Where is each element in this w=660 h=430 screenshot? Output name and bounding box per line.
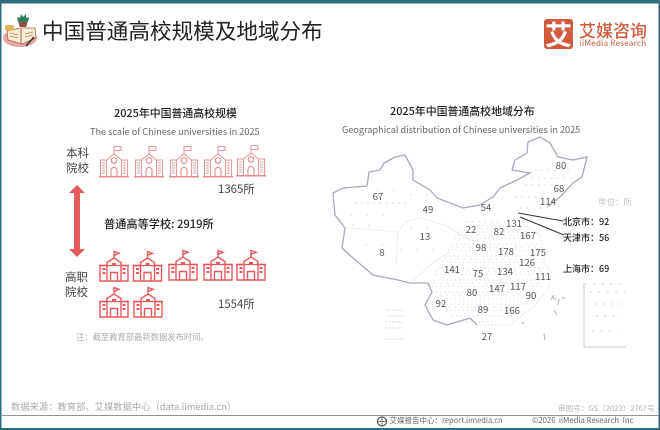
map values: 114: [540, 194, 556, 208]
map values: 82: [494, 224, 504, 238]
double arrow: [69, 185, 85, 257]
map values: 98: [476, 240, 486, 254]
map values: 89: [478, 302, 488, 316]
note: 注：截至教育部最新数据发布时间。: [76, 331, 209, 343]
map values: 49: [423, 202, 433, 216]
icon: report center globe: [378, 417, 386, 426]
map values: 166: [504, 303, 520, 317]
leader lines: Beijing and Tianjin: [518, 213, 564, 235]
map values: 131: [506, 216, 522, 230]
icons: undergraduate colleges: [99, 146, 266, 177]
icon: open book and plant: [3, 14, 37, 47]
callout: Beijing: 北京市：92: [563, 215, 609, 228]
total: 普通高等学校: 2919所: [104, 216, 214, 232]
logo: iiMedia Research: [544, 14, 647, 53]
map values: 8: [379, 245, 385, 259]
map values: 134: [497, 264, 513, 278]
map values: 67: [373, 189, 383, 203]
count: vocational: 1554所: [218, 296, 255, 312]
map values: 27: [482, 329, 492, 343]
map values: 117: [510, 279, 526, 293]
map values: 167: [520, 228, 536, 242]
map values: 75: [473, 266, 483, 280]
unit: 单位：所: [598, 196, 632, 208]
label: vocational: 高职院校: [65, 269, 88, 300]
logo mark: 艾: [545, 14, 572, 53]
source: 数据来源：教育部、艾媒数据中心（data.iimedia.cn）: [11, 399, 236, 413]
map values: 141: [444, 262, 460, 276]
subheading: scale: The scale of Chinese universities in 2025: [90, 124, 260, 138]
map values: 147: [489, 281, 505, 295]
callout: Shanghai: 上海市：69: [563, 262, 609, 275]
map approval number: 审图号：GS（2023）2767号: [558, 403, 655, 414]
logo english: iiMedia Research: [580, 37, 646, 49]
map legend: [385, 310, 404, 339]
footer divider: [1, 415, 659, 416]
title: 中国普通高校规模及地域分布: [42, 15, 323, 46]
inset map: South China Sea: [584, 283, 626, 347]
subheading: distribution: Geographical distribution of Chinese universities in 2025: [342, 122, 580, 136]
footer: report center: 艾媒报告中心：report.iimedia.cn: [390, 415, 503, 426]
map values: 68: [554, 181, 564, 195]
map values: 54: [481, 200, 491, 214]
map values: 126: [519, 255, 535, 269]
footer: copyright: ©2026 iiMedia Research Inc: [532, 415, 633, 426]
map values: 22: [466, 222, 476, 236]
logo name: 艾媒咨询: [579, 17, 647, 42]
map values: 111: [535, 269, 551, 283]
map values: 13: [420, 229, 430, 243]
callout: Tianjin: 天津市：56: [563, 231, 609, 244]
map values: 90: [526, 288, 536, 302]
map values: 92: [436, 296, 446, 310]
map values: 175: [530, 245, 546, 259]
map values: 178: [498, 244, 514, 258]
map values: 80: [556, 158, 566, 172]
map values: [373, 158, 566, 343]
heading: scale: 2025年中国普通高校规模: [114, 105, 237, 121]
heading: distribution: 2025年中国普通高校地域分布: [390, 103, 535, 119]
icons: vocational colleges: [99, 250, 266, 317]
map of China: [333, 137, 587, 340]
map values: 80: [467, 285, 477, 299]
label: undergraduate: 本科院校: [66, 145, 89, 176]
count: undergraduate: 1365所: [218, 181, 255, 197]
